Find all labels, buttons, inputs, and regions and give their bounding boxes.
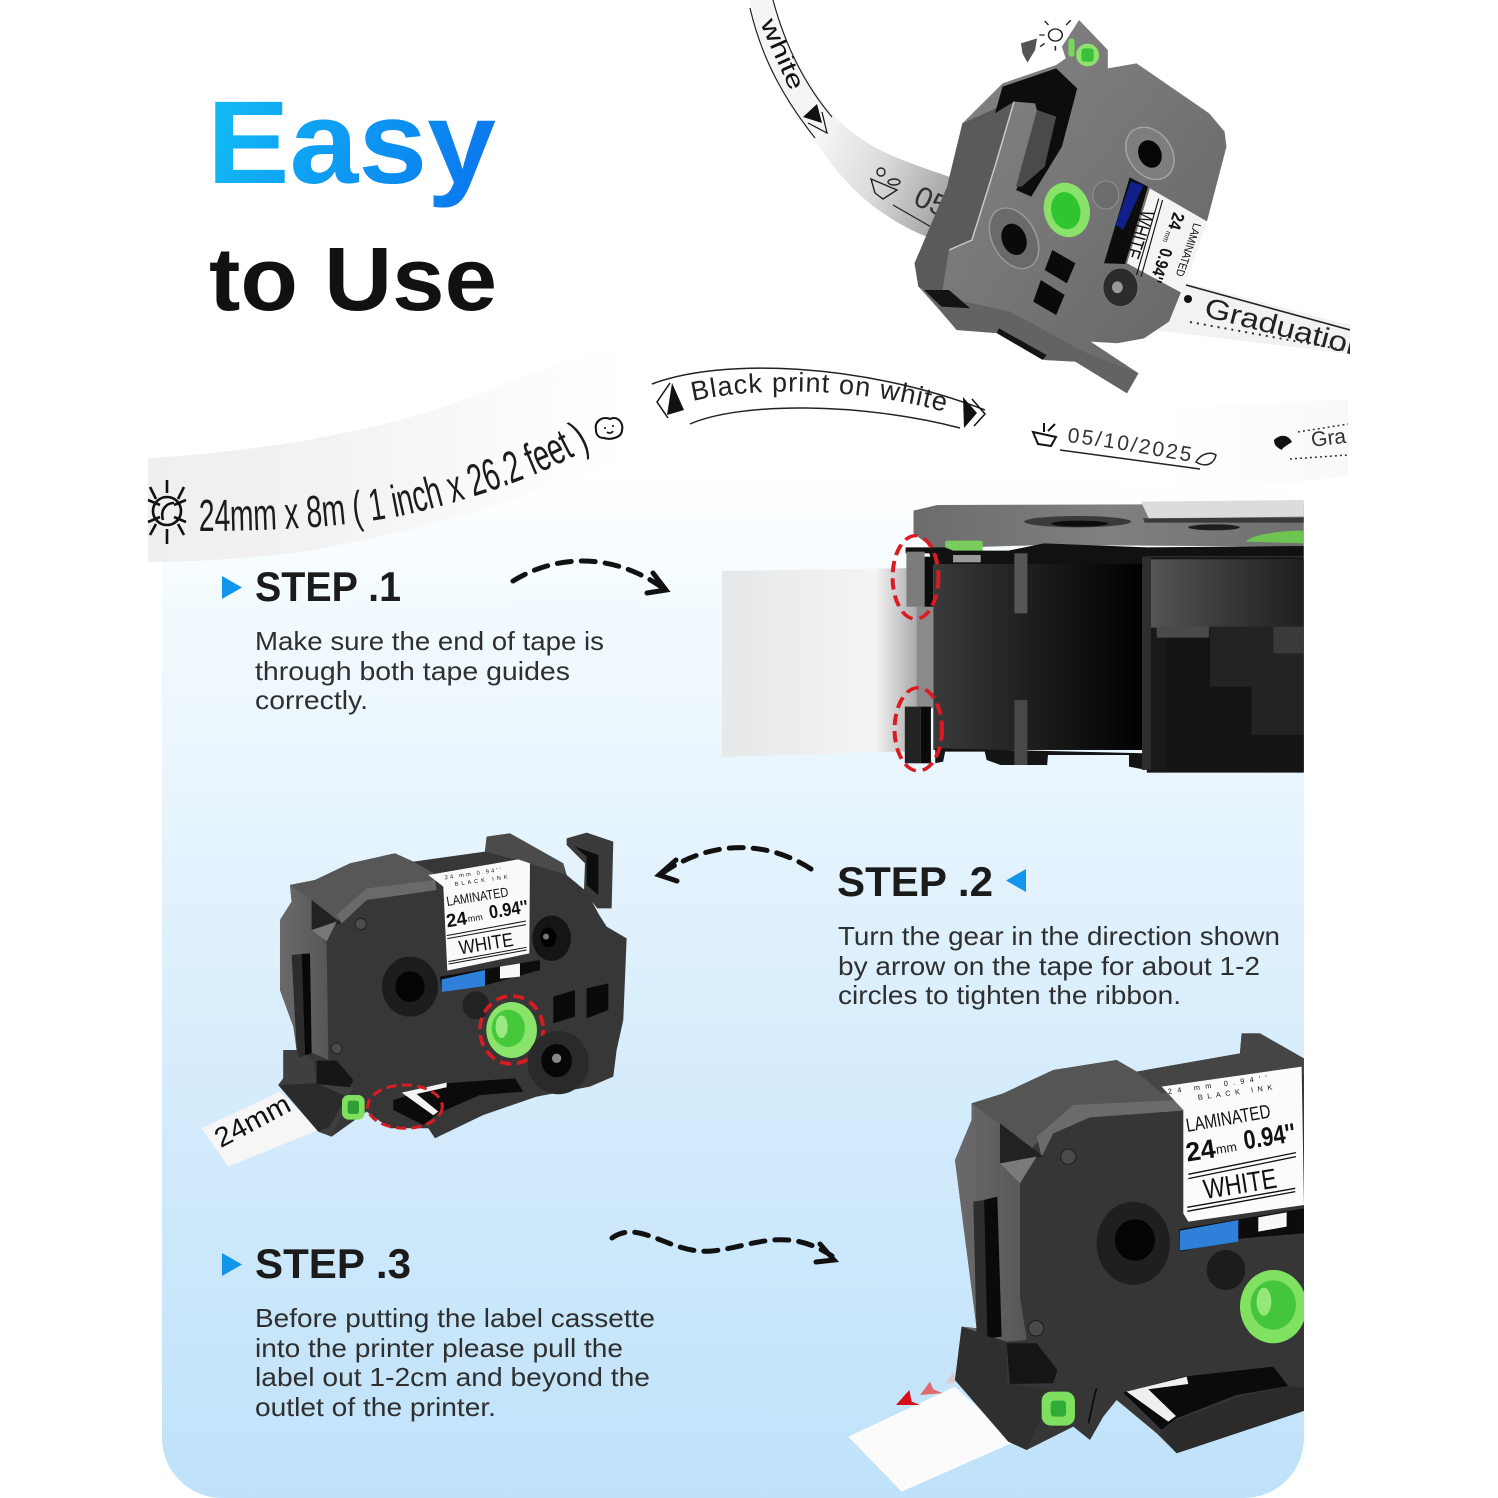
upper right spool bbox=[532, 916, 571, 961]
blue window bbox=[1104, 177, 1148, 264]
top surface right bbox=[1137, 1033, 1307, 1093]
cassette lower lip bbox=[920, 287, 1138, 393]
date text: 05/10/2025 bbox=[1068, 428, 1191, 461]
ribbon pot icon bbox=[871, 168, 900, 199]
cassette top opening bbox=[995, 68, 1077, 197]
dashed curve bbox=[664, 848, 811, 872]
small disc bbox=[1093, 181, 1119, 209]
marker triangle bbox=[222, 576, 242, 599]
small ledge bbox=[1157, 627, 1209, 638]
screw upper bbox=[1061, 1149, 1076, 1164]
cassette tab top right bbox=[567, 833, 613, 908]
small disc bbox=[463, 991, 489, 1019]
cassette left side bbox=[915, 100, 1014, 297]
step 1 arrow bbox=[513, 561, 666, 593]
leaf icon bbox=[1196, 453, 1216, 465]
lower spool bbox=[1103, 268, 1138, 307]
gear bore bbox=[1048, 190, 1083, 231]
line 2: by arrow on the tape for about 1-2 bbox=[838, 951, 1260, 981]
tape strip bbox=[722, 568, 918, 757]
tape text: 24mm bbox=[209, 1088, 296, 1154]
pot icon bbox=[1033, 423, 1056, 446]
ribbon right rules bbox=[1290, 424, 1348, 459]
green gear top bbox=[1246, 531, 1304, 543]
spool hole bbox=[997, 221, 1031, 258]
spool ring bbox=[532, 916, 571, 961]
line 4: outlet of the printer. bbox=[255, 1392, 496, 1422]
ribbon arrow icon bbox=[803, 104, 827, 133]
spool pin bbox=[552, 1054, 561, 1063]
spool ring bbox=[980, 202, 1048, 275]
guide bore bbox=[348, 1101, 359, 1114]
heading text: STEP .1 bbox=[255, 563, 401, 610]
banner text: Black print on white bbox=[691, 372, 946, 410]
sun rays bbox=[148, 480, 186, 544]
bottom tape ribbon bbox=[148, 367, 1348, 562]
ribbon date fragment: 05 bbox=[909, 180, 953, 224]
tiny label text: BLACK INK bbox=[1197, 1083, 1273, 1102]
cloud bbox=[596, 418, 622, 439]
red arrow three bbox=[945, 1372, 958, 1384]
white tape in opening bbox=[1127, 1377, 1188, 1422]
cassette label bbox=[1162, 1067, 1304, 1222]
mm: mm bbox=[1161, 230, 1172, 243]
size inch: 0.94'' bbox=[1146, 246, 1176, 285]
arrow outline bbox=[808, 112, 827, 133]
top bevel dark bbox=[485, 833, 567, 875]
sun disc bbox=[1049, 29, 1062, 41]
sun icon fragment bbox=[1039, 20, 1071, 51]
upper tape guide bbox=[906, 552, 933, 607]
WHITE: WHITE bbox=[1119, 208, 1158, 261]
ribbon text: Graduation: Graduation bbox=[1201, 292, 1369, 363]
notch bbox=[317, 1061, 353, 1087]
guide bore bbox=[1051, 1401, 1066, 1417]
label rules bbox=[1123, 199, 1163, 277]
guide rim bbox=[342, 1095, 365, 1120]
tiny label text: 24 mm 0.94'' bbox=[444, 867, 501, 881]
left slit bbox=[973, 1197, 1002, 1338]
LAMINATED: LAMINATED bbox=[1172, 222, 1203, 278]
right block highlight bbox=[1151, 559, 1304, 628]
gear rim bbox=[1040, 180, 1094, 240]
dashed curve bbox=[612, 1232, 832, 1256]
right block stepped area bbox=[1167, 637, 1304, 772]
ring bbox=[1117, 120, 1183, 186]
gear bore bbox=[492, 1010, 525, 1047]
gear rim bbox=[1240, 1270, 1307, 1343]
step 2 heading bbox=[837, 858, 1026, 905]
mm: mm bbox=[1215, 1140, 1238, 1157]
heart icon bbox=[1274, 436, 1292, 450]
marker triangle bbox=[1006, 869, 1026, 892]
WHITE: WHITE bbox=[457, 930, 515, 959]
arrow head bbox=[816, 1244, 834, 1262]
lower tape guide bbox=[905, 707, 931, 763]
title bbox=[207, 77, 497, 330]
tape 24mm bbox=[202, 1088, 318, 1167]
sun rays bbox=[1039, 20, 1071, 51]
label plate bbox=[1127, 188, 1207, 293]
24: 24 bbox=[1164, 211, 1188, 232]
arrow outline bbox=[972, 399, 985, 426]
lower right lip bbox=[1160, 1386, 1307, 1453]
heading text: STEP .2 bbox=[837, 858, 993, 905]
line 1: Turn the gear in the direction shown bbox=[838, 921, 1280, 951]
lower spool bbox=[528, 1031, 589, 1094]
curved slot bbox=[1088, 1388, 1097, 1423]
label plate bbox=[428, 859, 530, 971]
ribbon band lower right bbox=[1156, 282, 1350, 354]
pot bbox=[871, 179, 897, 199]
reel hole bbox=[1097, 1202, 1170, 1285]
title words: to Use: to Use bbox=[209, 230, 497, 330]
screw upper bbox=[355, 918, 366, 930]
dashed curve bbox=[513, 561, 660, 586]
loose tab bbox=[1021, 38, 1037, 63]
arrow outline bbox=[657, 383, 670, 418]
screw lower bbox=[331, 1043, 342, 1054]
reel hole right bbox=[1188, 524, 1240, 530]
light facet bbox=[312, 922, 337, 942]
side wall bbox=[955, 1103, 1027, 1342]
mm: mm bbox=[467, 912, 483, 924]
ribbon line right top bbox=[1186, 285, 1350, 330]
WHITE: WHITE bbox=[1201, 1163, 1279, 1205]
step 1 body text bbox=[255, 626, 604, 715]
guide edge bbox=[925, 557, 933, 607]
cassette highlight strip bbox=[949, 102, 1014, 250]
step 2 body text bbox=[838, 921, 1280, 1010]
spool centre bbox=[1112, 281, 1123, 293]
window strip bbox=[1179, 1208, 1304, 1252]
0.94 inch: 0.94'' bbox=[487, 896, 529, 923]
line 3: circles to tighten the ribbon. bbox=[838, 980, 1181, 1010]
spool ring bbox=[528, 1031, 589, 1094]
right block bbox=[1147, 557, 1304, 773]
reel hole large bbox=[1024, 516, 1131, 527]
hole bbox=[1135, 138, 1165, 170]
LAMINATED: LAMINATED bbox=[1185, 1101, 1272, 1137]
left strip bbox=[917, 605, 933, 708]
red dashed circle around guide bbox=[368, 1085, 442, 1128]
date underline bbox=[1060, 450, 1200, 469]
line 3: correctly. bbox=[255, 685, 368, 715]
outlet slit bbox=[1068, 38, 1075, 57]
arrow head bbox=[647, 573, 666, 593]
main reel hole bbox=[1117, 120, 1183, 186]
step 3 cassette image bbox=[848, 1033, 1307, 1492]
main black panel bbox=[933, 564, 1143, 750]
step 2 arrow bbox=[659, 848, 811, 881]
red dashed circle around gear bbox=[480, 996, 543, 1064]
lower bits bbox=[935, 748, 1147, 770]
left banner arrow bbox=[657, 383, 684, 418]
label plate bbox=[1162, 1067, 1304, 1222]
cassette inner reel bbox=[1016, 110, 1056, 187]
cassette label bbox=[428, 859, 530, 971]
right banner arrow bbox=[963, 397, 985, 428]
leaves bbox=[877, 168, 885, 176]
white tape bbox=[1258, 1212, 1287, 1232]
top tape ribbon bbox=[750, 0, 1369, 363]
heading text: STEP .3 bbox=[255, 1240, 411, 1287]
window strip bbox=[440, 960, 540, 992]
title word: Easy: Easy bbox=[207, 77, 496, 209]
outlet outer bbox=[1076, 44, 1099, 66]
blue tape bbox=[1180, 1220, 1238, 1251]
left spool bbox=[980, 202, 1048, 275]
red dashed circle lower bbox=[895, 688, 942, 771]
white tape in opening bbox=[402, 1083, 447, 1115]
top surface bbox=[972, 1060, 1183, 1153]
vertical rail bbox=[1142, 557, 1151, 770]
ribbon band bbox=[148, 415, 422, 562]
banner rules bbox=[652, 368, 985, 428]
sun icon bbox=[148, 480, 186, 544]
green outlet top bbox=[945, 541, 983, 554]
step 3 heading bbox=[222, 1240, 411, 1287]
guide edge bbox=[921, 707, 931, 763]
tiny label text: 24 mm 0.94'' bbox=[1167, 1073, 1268, 1096]
outlet inner bbox=[1081, 48, 1094, 62]
spool bore bbox=[541, 1044, 572, 1077]
reel hole centre bbox=[1051, 521, 1108, 527]
cassette top face bbox=[914, 504, 1304, 548]
red dashed circle upper bbox=[893, 536, 938, 619]
ribbon edges bbox=[750, 0, 933, 228]
notch bbox=[1007, 1343, 1057, 1384]
cassette side wall bbox=[280, 885, 328, 1060]
gear rim bbox=[486, 1002, 537, 1058]
green gear bbox=[486, 1002, 537, 1058]
24: 24 bbox=[445, 907, 469, 931]
step 2 cassette image bbox=[202, 833, 627, 1167]
gear shine bbox=[496, 1015, 508, 1038]
square windows bbox=[553, 983, 608, 1023]
cassette square windows bbox=[1033, 250, 1075, 315]
sun inner arc bbox=[162, 503, 174, 520]
small disc bbox=[1207, 1250, 1245, 1290]
arrow solid bbox=[963, 397, 977, 428]
bottom opening bbox=[393, 1078, 523, 1125]
ledge bbox=[278, 1050, 353, 1137]
line 3: label out 1-2cm and beyond the bbox=[255, 1362, 650, 1392]
arrow solid bbox=[667, 383, 684, 415]
spool bore bbox=[540, 927, 556, 947]
smiley cloud icon bbox=[596, 418, 622, 439]
eyes and mouth bbox=[605, 425, 613, 433]
cassette silhouette bbox=[278, 833, 627, 1138]
right notch bbox=[1273, 627, 1304, 653]
red arrow one bbox=[896, 1390, 920, 1405]
slit dark bbox=[302, 953, 312, 1055]
cassette top surface bbox=[290, 853, 437, 923]
cassette lower slot bbox=[924, 290, 1047, 360]
slit face bbox=[973, 1200, 987, 1338]
step 1 heading bbox=[222, 563, 401, 610]
light rod bbox=[953, 555, 981, 562]
arrow head bbox=[659, 860, 677, 881]
slit dark bbox=[984, 1197, 1002, 1338]
step 3 arrow bbox=[612, 1232, 834, 1262]
reel ring bbox=[1097, 1202, 1170, 1285]
upper band bbox=[906, 543, 1304, 566]
base shadow bbox=[278, 1083, 347, 1132]
background panel bbox=[162, 470, 1304, 1498]
base ledge bbox=[955, 1327, 1053, 1450]
spool ring bbox=[1103, 268, 1138, 307]
LAMINATED: LAMINATED bbox=[445, 884, 509, 909]
size text: 24mm x 8m ( 1 inch x 26.2 feet ) bbox=[200, 422, 590, 532]
tape strip bbox=[202, 1092, 318, 1167]
spool pin bbox=[543, 934, 549, 940]
0.94 inch: 0.94'' bbox=[1241, 1117, 1298, 1155]
line 1: Make sure the end of tape is bbox=[255, 626, 604, 656]
reel hole bbox=[382, 957, 438, 1017]
tape strip bbox=[848, 1387, 1015, 1492]
cassette body silhouette bbox=[915, 20, 1226, 393]
slit face bbox=[292, 954, 305, 1058]
guide front bbox=[905, 707, 921, 763]
dark slot bbox=[1000, 1123, 1043, 1163]
right block mid tone bbox=[1210, 627, 1304, 735]
label rules bbox=[447, 921, 527, 964]
lower post bbox=[1014, 700, 1027, 765]
cassette silhouette bbox=[955, 1033, 1307, 1453]
outlet green gear bbox=[1068, 38, 1099, 66]
top bevel highlight bbox=[337, 880, 437, 923]
small green guide bbox=[1042, 1392, 1075, 1426]
ribbon heart dot bbox=[1184, 295, 1192, 303]
marker triangle bbox=[222, 1253, 242, 1276]
step 1 cassette image bbox=[722, 500, 1304, 773]
blue tape bbox=[442, 970, 485, 992]
dark slot bbox=[312, 900, 342, 930]
red arrow two bbox=[920, 1382, 943, 1395]
ribbon band upper left bbox=[750, 0, 950, 238]
green gear bbox=[1240, 1270, 1307, 1343]
upper post bbox=[1014, 553, 1027, 613]
blue tape bbox=[1115, 182, 1143, 230]
tiny label text: BLACK INK bbox=[454, 875, 508, 888]
guide rim bbox=[1042, 1392, 1075, 1426]
top bevel highlight bbox=[1037, 1100, 1183, 1157]
white tape bbox=[500, 963, 520, 979]
silver label edge bbox=[1141, 500, 1304, 518]
left slit bbox=[292, 953, 312, 1058]
top cassette bbox=[915, 20, 1226, 393]
label shadow bbox=[1143, 518, 1304, 523]
screw lower bbox=[1028, 1321, 1044, 1336]
arrow solid bbox=[803, 104, 822, 123]
24: 24 bbox=[1184, 1133, 1218, 1168]
cassette label bbox=[1119, 188, 1207, 293]
reel bore bbox=[1115, 1219, 1155, 1261]
tab opening bbox=[575, 847, 598, 895]
ribbon text: white: white bbox=[754, 13, 810, 94]
gear bore bbox=[1251, 1280, 1296, 1330]
line 2: into the printer please pull the bbox=[255, 1333, 623, 1363]
reel ring bbox=[382, 957, 438, 1017]
small green guide bbox=[342, 1095, 365, 1120]
side leaf bbox=[888, 179, 900, 185]
reel bore bbox=[395, 971, 425, 1002]
gear shine bbox=[1257, 1288, 1271, 1316]
bottom opening bbox=[1123, 1367, 1288, 1430]
green gear bbox=[1040, 180, 1094, 240]
light facet bbox=[1000, 1157, 1037, 1183]
step 3 body text bbox=[255, 1303, 655, 1422]
ribbon dotted line bbox=[1190, 322, 1350, 351]
sun disc bbox=[153, 497, 181, 525]
guide front bbox=[906, 552, 925, 607]
line 1: Before putting the label cassette bbox=[255, 1303, 655, 1333]
label rules bbox=[1187, 1153, 1296, 1211]
line 2: through both tape guides bbox=[255, 656, 570, 686]
